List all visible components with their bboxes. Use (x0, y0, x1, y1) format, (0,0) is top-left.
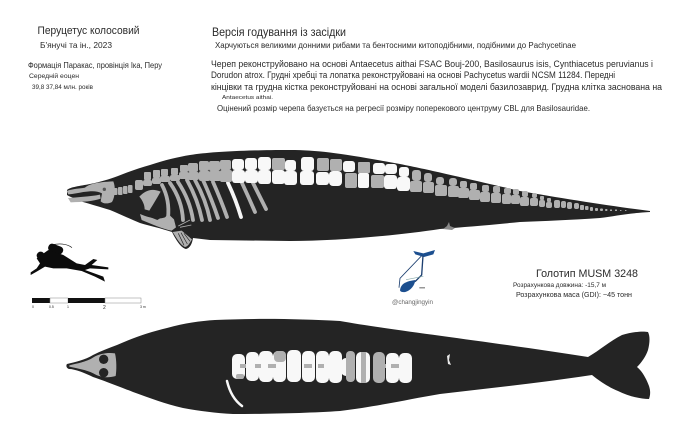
vestigial hind limb (443, 222, 455, 230)
holotype info text block (513, 268, 638, 299)
dorsal hind limb (447, 354, 451, 365)
icon: scuba diver silhouette for scale (31, 243, 108, 282)
artist credit: @changjingyin (392, 300, 433, 306)
pectoral girdle and flipper bones (139, 190, 192, 247)
skeleton basis line 2: Dorudon atrox. Грудні хребці та лопатка реконструйовані на основі Pachycetus wardii NCSM 11284. Передні (211, 70, 615, 80)
scale labels: 1 (67, 305, 69, 309)
estimated mass: Розрахункова маса (GDI): ~45 тонн (516, 290, 632, 299)
title: species name: Перуцетус колосовий (38, 25, 140, 37)
side body silhouette (67, 150, 650, 249)
dorsal vertebral column (232, 350, 412, 383)
scale labels: 2 (103, 305, 106, 311)
age range: 39,8 37,84 млн. років (32, 85, 93, 91)
vertebral column (113, 160, 232, 195)
dorsal view whale with skeleton (66, 319, 650, 414)
estimated length: Розрахункова довжина: -15,7 м (513, 282, 607, 289)
reconstruction notes text block (211, 25, 662, 113)
skeleton basis line 1: Череп реконструйовано на основі Antaecetus aithai FSAC Bouj-200, Basilosaurus isis, Cynthiacetus peruvianus і (211, 59, 653, 69)
skull dorsal view (69, 353, 116, 377)
skull size estimate note: Оцінений розмір черепа базується на регресії розміру поперекового центруму CBL для Basilosauridae. (217, 103, 590, 113)
artist logo: whale drawing (392, 250, 435, 306)
ribs (162, 180, 266, 220)
species info text block (28, 25, 162, 91)
skeleton basis line 4: Antaecetus aithai. (222, 95, 274, 101)
scale bar (32, 298, 146, 311)
scale labels: 0 (32, 305, 34, 309)
scale labels: 0.5 (49, 305, 54, 309)
skull side view (67, 181, 115, 203)
dorsal body silhouette with fluke (66, 319, 650, 414)
formation and locality: Формація Паракас, провінція Іка, Перу (28, 61, 162, 70)
authorship: Б'янучі та ін., 2023 (40, 41, 113, 50)
diet description: Харчуються великими донними рибами та бентосними китоподібними, подібними до Pachycetinae (215, 41, 577, 50)
heading: feeding version: Версія годування із засідки (212, 25, 346, 39)
scale labels: 3 m (140, 305, 146, 309)
holotype heading: Голотип MUSM 3248 (536, 268, 638, 280)
scale labels (32, 305, 146, 311)
dorsal rib (227, 381, 242, 406)
epoch: Середній еоцен (29, 72, 79, 80)
skeleton basis line 3: кінцівки та грудна кістка реконструйовані на основі загальної моделі базилозаврид. Грудна клітка заснована на (211, 82, 662, 92)
side view whale with skeleton (67, 150, 650, 249)
